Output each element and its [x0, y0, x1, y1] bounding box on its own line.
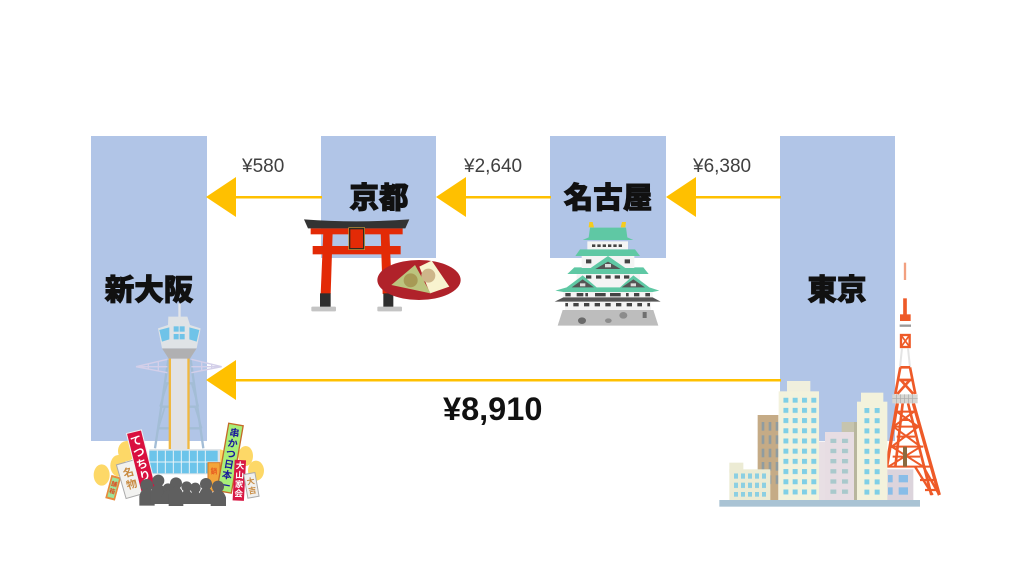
icon: Tsutenkaku tower and Shinsekai: 吉 — [247, 485, 257, 496]
icon: Nagoya castle — [555, 222, 661, 326]
icon: Tsutenkaku tower and Shinsekai: 名 — [121, 465, 135, 480]
arrow: Kyoto to Shin-Osaka — [206, 177, 322, 217]
dark roof band — [555, 297, 661, 302]
pink building — [825, 432, 854, 500]
icon: Tsutenkaku tower and Shinsekai: 物 — [125, 477, 139, 492]
arrow: Tokyo to Shin-Osaka — [206, 360, 781, 400]
icon: Tsutenkaku tower and Shinsekai: 会 — [234, 487, 244, 499]
tall building — [787, 381, 810, 393]
antenna — [178, 303, 181, 318]
feet — [320, 293, 331, 307]
lower gables — [555, 275, 659, 292]
icon: Tsutenkaku tower and Shinsekai: 日 — [223, 458, 235, 472]
third tier — [577, 274, 640, 287]
observation cabin — [162, 348, 197, 359]
fare: 6,380 yen: ¥6,380 — [692, 156, 751, 177]
stone base — [558, 310, 658, 326]
icon: Tsutenkaku tower and Shinsekai: つ — [132, 446, 146, 461]
icon: Tsutenkaku tower and Shinsekai: り — [138, 468, 152, 484]
small signs: 箱 — [108, 487, 116, 496]
panel: Nagoya — [550, 136, 666, 258]
fare: 580 yen: ¥580 — [241, 156, 284, 177]
pillars — [321, 232, 333, 294]
lattice legs — [155, 360, 203, 448]
icon: Tokyo skyline and tower — [719, 263, 939, 507]
heading: Nagoya: 名古屋 — [564, 182, 652, 215]
heading: Tokyo: 東京 — [807, 274, 867, 307]
small building — [729, 463, 743, 473]
icon: torii gate — [304, 219, 409, 311]
crossbeams — [311, 228, 403, 234]
panel: Kyoto — [321, 136, 436, 258]
golden shachi — [589, 222, 626, 227]
panel: Tokyo — [780, 136, 895, 441]
icon: Tsutenkaku tower and Shinsekai: ち — [135, 457, 149, 472]
icon: yatsuhashi on plate — [377, 260, 461, 300]
tower shaft — [169, 358, 189, 450]
icon: Tsutenkaku tower and Shinsekai: 大 — [246, 475, 255, 487]
fare: 2,640 yen: ¥2,640 — [463, 156, 522, 177]
top tier — [587, 241, 628, 249]
icon: Tsutenkaku tower and Shinsekai: 串 — [228, 426, 241, 440]
crowd silhouettes — [139, 475, 226, 506]
small signs — [105, 475, 121, 501]
lower walls — [565, 301, 651, 310]
Tokyo Tower — [887, 263, 939, 495]
icon: Tsutenkaku tower and Shinsekai: 鍋 — [211, 466, 218, 475]
neon sign wings — [136, 359, 222, 373]
icon: Tsutenkaku tower and Shinsekai — [94, 303, 264, 506]
right building — [861, 393, 883, 403]
back building — [842, 422, 858, 499]
icon: Tsutenkaku tower and Shinsekai: 大 — [235, 459, 245, 471]
tower deck — [892, 394, 918, 403]
icon: Tsutenkaku tower and Shinsekai: て — [129, 435, 143, 449]
arrow: Tokyo to Nagoya — [666, 177, 781, 217]
second tier — [582, 256, 634, 268]
heading: Shin-Osaka: 新大阪 — [105, 274, 194, 307]
roof — [304, 219, 409, 228]
icon: Tsutenkaku tower and Shinsekai: 山 — [235, 470, 244, 480]
icon: Tsutenkaku tower and Shinsekai: か — [227, 437, 239, 451]
ground — [719, 500, 920, 507]
lanterns — [94, 441, 264, 486]
arrow: Nagoya to Kyoto — [436, 177, 551, 217]
heading: Kyoto: 京都 — [349, 182, 409, 215]
icon: Tsutenkaku tower and Shinsekai: つ — [225, 449, 236, 461]
icon: Tsutenkaku tower and Shinsekai: 本 — [221, 468, 233, 482]
icon: Tsutenkaku tower and Shinsekai: 一 — [219, 480, 231, 493]
base building — [149, 449, 220, 474]
total fare: 8,910 yen: ¥8,910 — [443, 391, 542, 427]
icon: Tsutenkaku tower and Shinsekai: 家 — [235, 478, 244, 490]
plaque — [350, 229, 364, 249]
small signs: 舗 — [110, 480, 118, 489]
panel: Shin-Osaka — [91, 136, 207, 441]
